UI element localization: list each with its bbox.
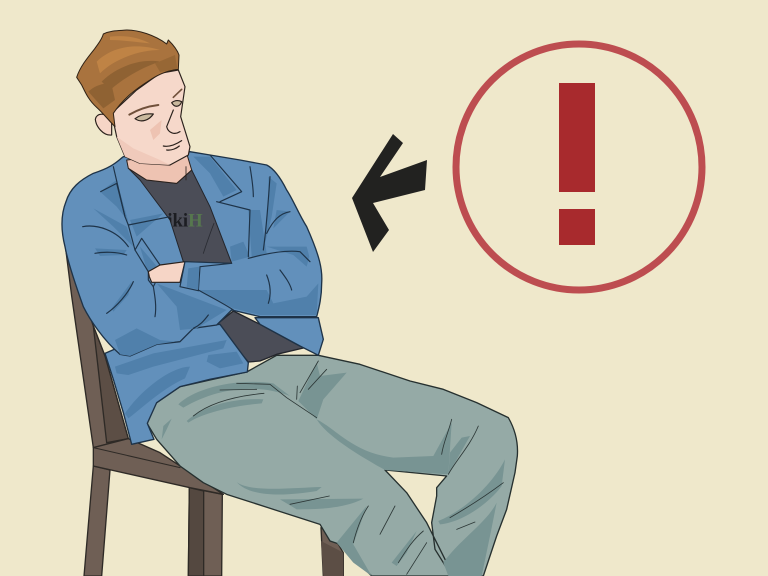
arrow pointing at man — [352, 134, 427, 252]
chair — [65, 243, 343, 576]
man on chair — [62, 30, 518, 576]
t-shirt with logo — [128, 168, 232, 263]
shirt lower — [217, 311, 305, 362]
hand — [148, 262, 185, 282]
jacket lapels and lines — [83, 155, 310, 328]
eyes and brows — [129, 89, 182, 150]
head — [77, 30, 190, 165]
warning icon: red circle with exclamation mark — [456, 44, 702, 290]
hair — [77, 30, 179, 127]
right sleeve cuff — [180, 262, 232, 291]
ear — [95, 114, 112, 135]
shirt logo text: ikiH — [167, 211, 203, 232]
jacket — [62, 152, 323, 444]
illustration: man slouching on chair with warning sign — [61, 30, 706, 576]
neck — [127, 153, 192, 183]
trousers — [147, 355, 518, 576]
jacket shading — [93, 157, 318, 356]
face — [112, 70, 190, 165]
